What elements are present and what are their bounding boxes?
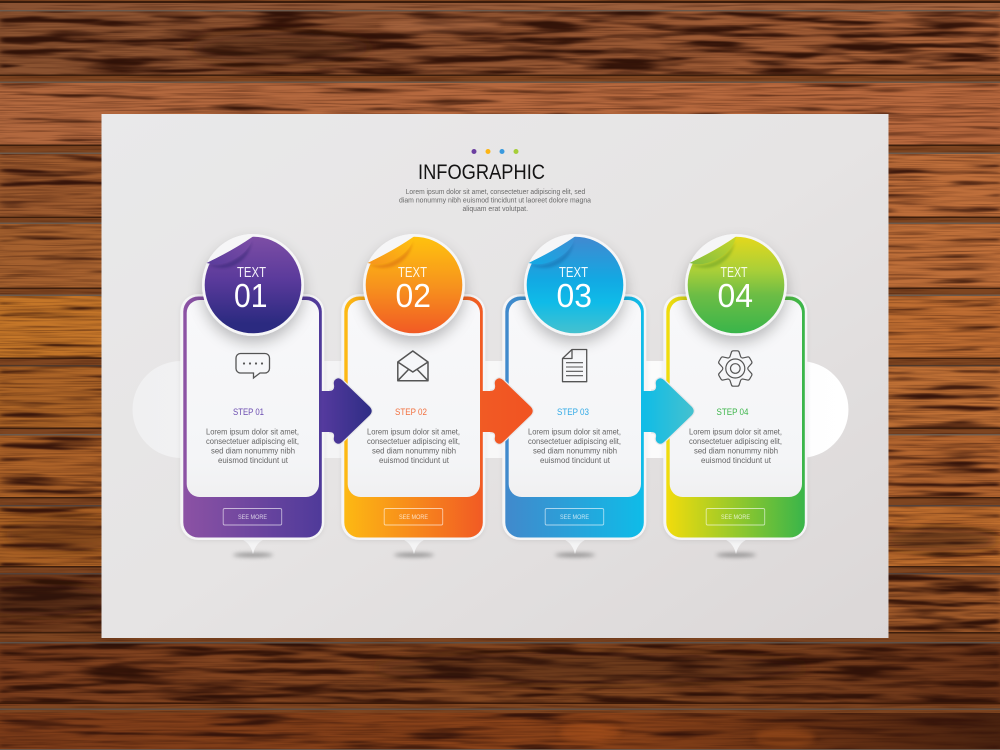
card 1 [180, 294, 324, 557]
circle badge 1: 01 [234, 277, 268, 314]
circle badge 2: 02 [396, 277, 431, 314]
card 3: Lorem ipsum dolor sit amet, [528, 427, 621, 436]
circle badge 3 [524, 234, 626, 336]
card 3: consectetuer adipiscing elit, [528, 437, 621, 446]
icon: document [562, 350, 587, 382]
card 1: consectetuer adipiscing elit, [206, 437, 299, 446]
card 2: STEP 02 [395, 407, 427, 418]
card 2: sed diam nonummy nibh [372, 446, 456, 456]
card 4: Lorem ipsum dolor sit amet, [689, 427, 782, 436]
card 4: euismod tincidunt ut [701, 456, 772, 465]
card 4: SEE MORE [721, 515, 750, 521]
circle badge 4 [685, 234, 787, 336]
card 3 [502, 294, 646, 557]
card 1: sed diam nonummy nibh [211, 446, 295, 456]
card 1: euismod tincidunt ut [218, 456, 289, 465]
intro text: Lorem ipsum dolor sit amet, consectetuer adipiscing elit, sed [406, 189, 585, 196]
circle badge 1 [202, 234, 304, 336]
icon: gear [717, 351, 754, 386]
card 2 [341, 294, 485, 557]
card 1: Lorem ipsum dolor sit amet, [206, 427, 299, 436]
card 3: sed diam nonummy nibh [533, 446, 617, 456]
card 4: consectetuer adipiscing elit, [689, 437, 782, 446]
intro text: aliquam erat volutpat. [462, 206, 528, 213]
card 2: consectetuer adipiscing elit, [367, 437, 460, 446]
card 3: STEP 03 [557, 407, 589, 418]
intro text: diam nonummy nibh euismod tincidunt ut laoreet dolore magna [399, 198, 591, 204]
circle badge 1: TEXT [237, 265, 266, 281]
arrow 1 [322, 378, 372, 444]
card 1: SEE MORE [238, 515, 267, 521]
card 3: SEE MORE [560, 515, 589, 521]
title: INFOGRAPHIC [418, 161, 545, 184]
card 2: SEE MORE [399, 515, 428, 521]
arrow 3 [644, 378, 694, 444]
card 3: euismod tincidunt ut [540, 456, 611, 465]
circle badge 4: TEXT [720, 265, 748, 281]
icon: envelope [398, 351, 428, 381]
four coloured dots [472, 149, 518, 154]
paper sheet [102, 114, 888, 638]
card 4: STEP 04 [716, 407, 748, 418]
card 4 [663, 294, 807, 557]
card 2: Lorem ipsum dolor sit amet, [367, 427, 460, 436]
background band with rounded ends [133, 361, 848, 458]
circle badge 3: 03 [556, 277, 592, 314]
card 2: euismod tincidunt ut [379, 456, 450, 465]
circle badge 4: 04 [718, 277, 753, 314]
circle badge 3: TEXT [559, 265, 588, 281]
icon: speech bubble [236, 354, 270, 378]
circle badge 2: TEXT [398, 265, 427, 281]
card 1: STEP 01 [233, 407, 264, 418]
circle badge 2 [363, 234, 465, 336]
arrow 2 [482, 378, 533, 444]
card 4: sed diam nonummy nibh [694, 446, 778, 456]
intro text [399, 189, 591, 213]
